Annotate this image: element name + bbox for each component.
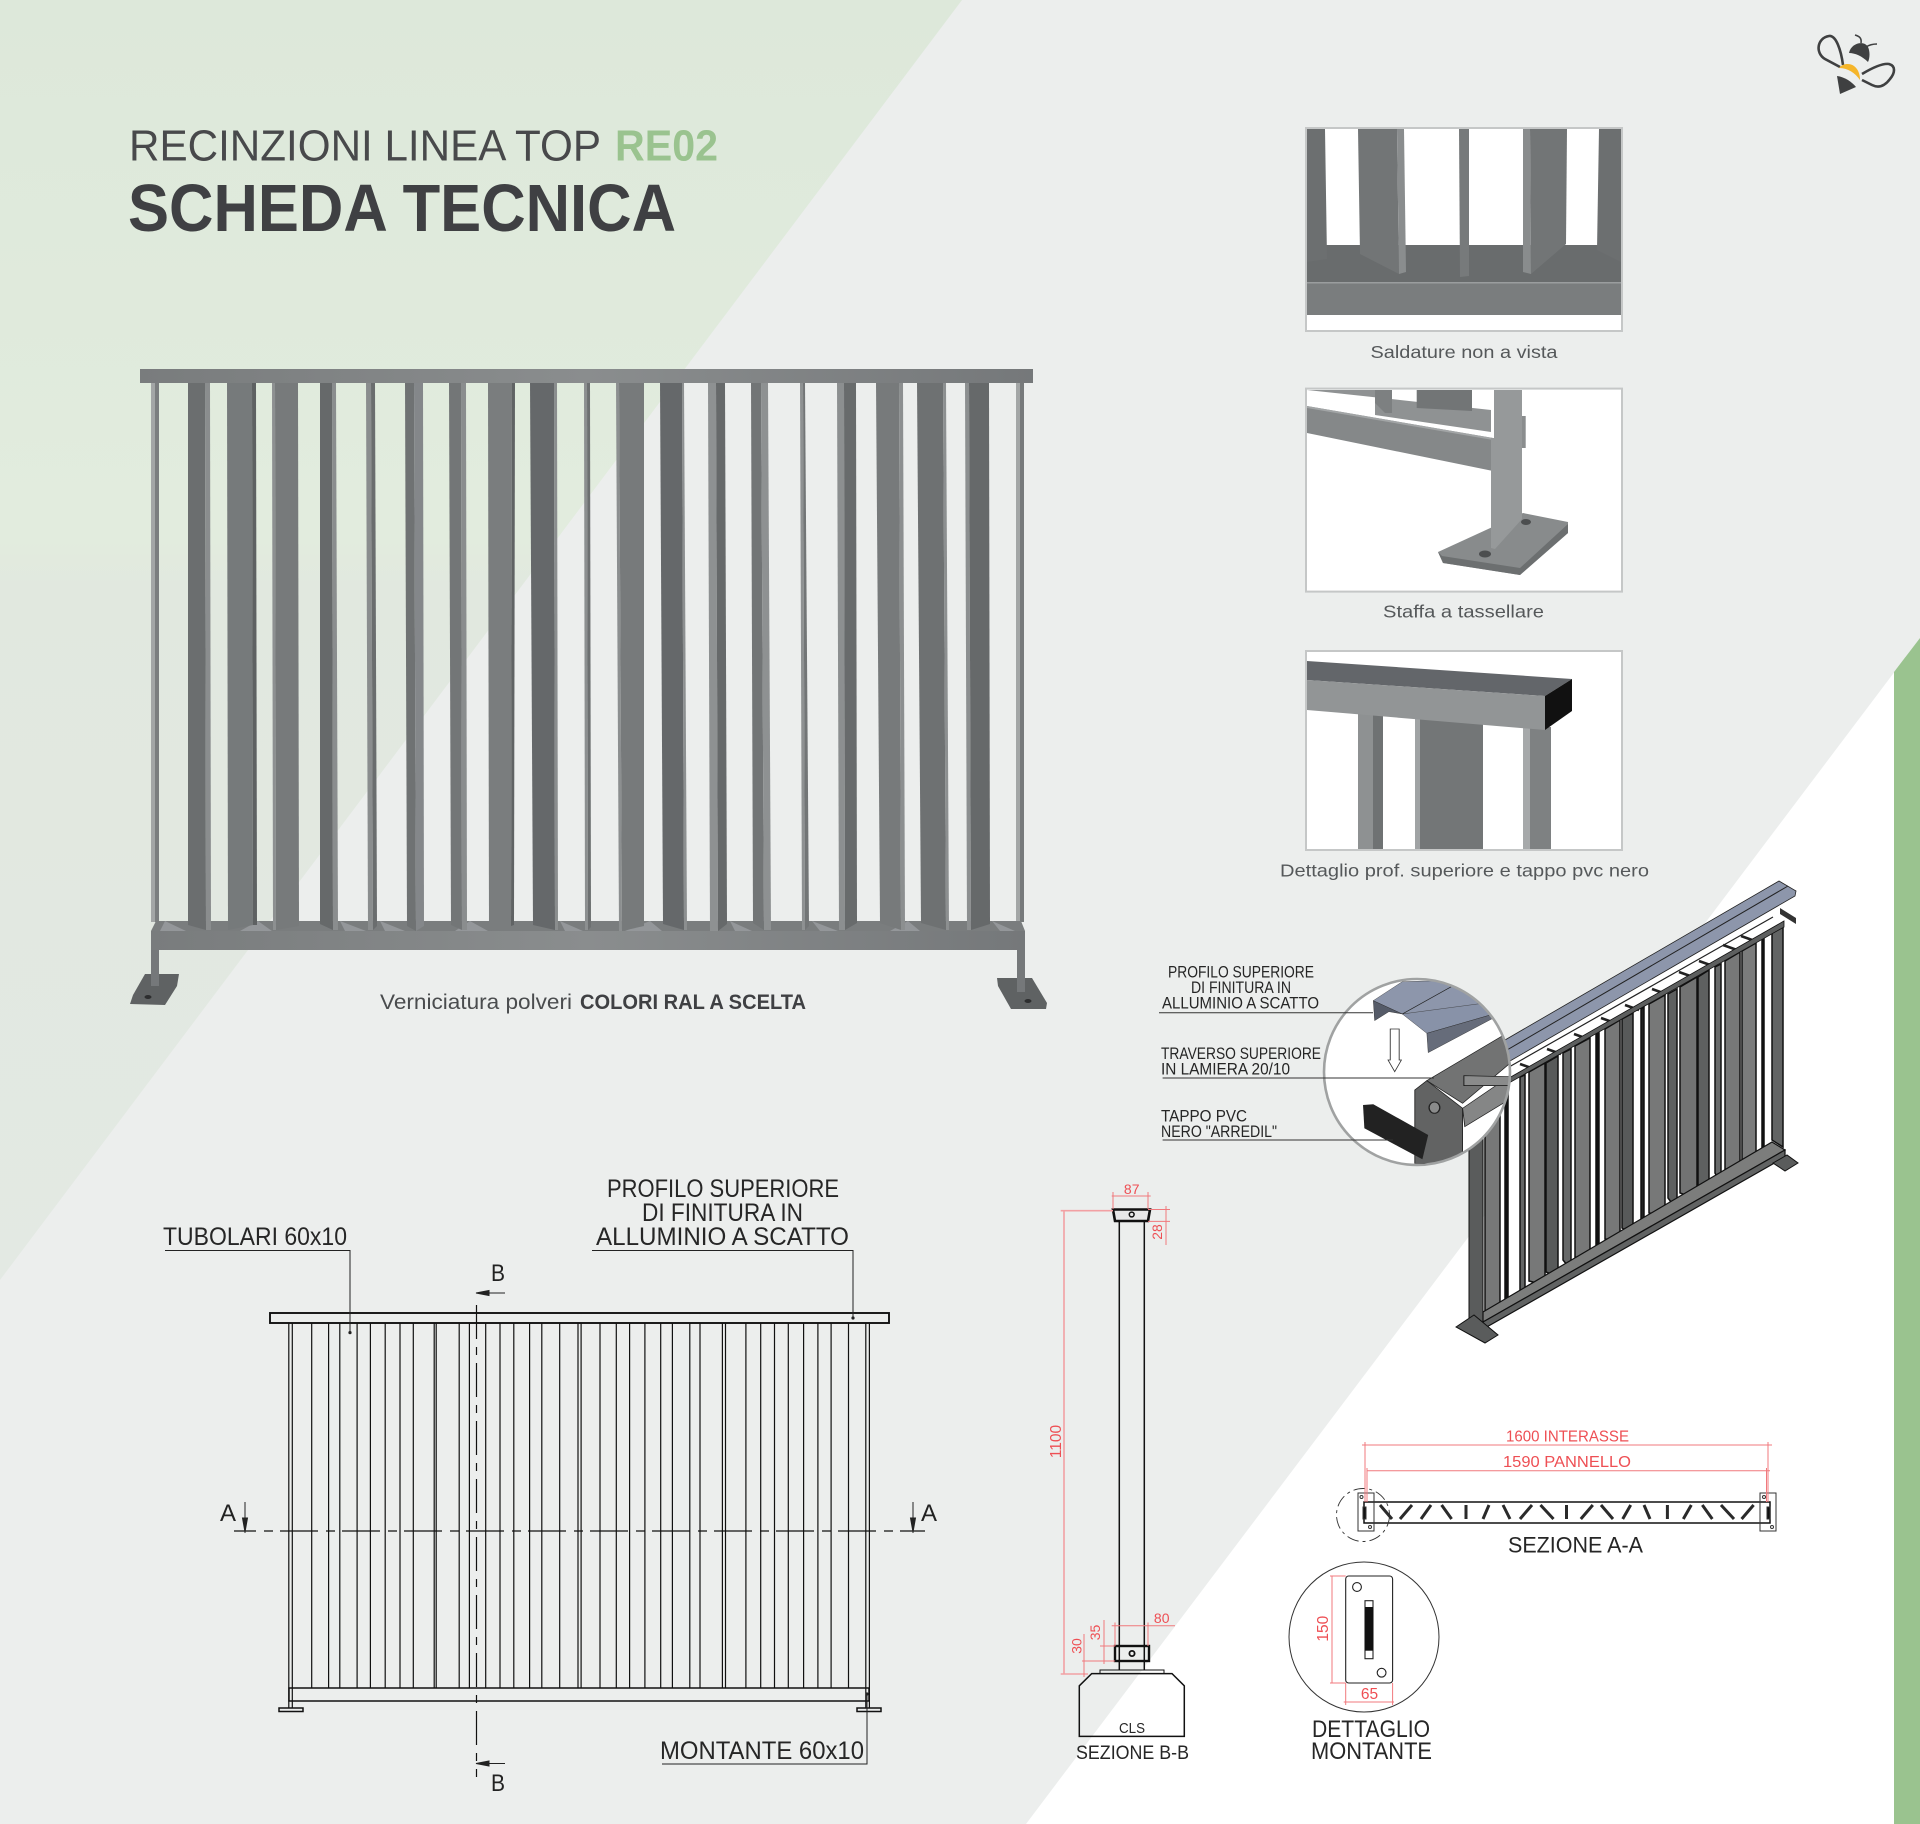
iso callout: tappo pvc: NERO "ARREDIL"	[1161, 1123, 1277, 1141]
iso frame top rail	[1509, 917, 1784, 1083]
dimension values: 87	[1124, 1181, 1140, 1197]
elevation bottom rail and feet	[279, 1688, 881, 1712]
dimension values: 30	[1068, 1638, 1084, 1654]
upright slot	[1365, 1607, 1373, 1651]
iso top profile	[1505, 881, 1796, 1061]
panel: staffa photo	[1306, 389, 1622, 592]
dimension lines	[1061, 1192, 1175, 1677]
label: dettaglio montante	[1311, 1716, 1432, 1765]
concrete block	[1079, 1674, 1184, 1736]
iso end cap	[1780, 908, 1796, 924]
background: green strip	[1894, 638, 1920, 1824]
caption: profile detail: Dettaglio prof. superiore e tappo pvc nero	[1280, 861, 1649, 881]
iso callout: traverso superiore: IN LAMIERA 20/10	[1161, 1061, 1290, 1079]
dimension values: 28	[1149, 1224, 1165, 1240]
title	[128, 122, 718, 246]
section letters: B	[491, 1770, 505, 1797]
caption: saldature: Saldature non a vista	[1370, 342, 1558, 362]
section A-A end plates	[1358, 1493, 1776, 1531]
label: sezione B-B: SEZIONE B-B	[1076, 1743, 1189, 1764]
iso callout: traverso superiore	[1161, 1045, 1321, 1079]
leader dots	[348, 1316, 869, 1696]
section arrows	[242, 1290, 916, 1766]
section letters: B	[491, 1260, 505, 1287]
label: sezione A-A: SEZIONE A-A	[1508, 1533, 1643, 1558]
iso callout: profilo superiore: DI FINITURA IN	[1191, 979, 1291, 997]
base plate	[1346, 1576, 1393, 1683]
iso white backing	[1483, 900, 1790, 1325]
iso callout: tappo pvc	[1161, 1108, 1277, 1141]
iso bars	[1485, 927, 1783, 1312]
section line A-A	[234, 1530, 925, 1532]
dimension values: 80	[1154, 1610, 1170, 1626]
iso callout: tappo pvc: TAPPO PVC	[1161, 1108, 1247, 1126]
technical drawing: front elevation	[163, 1175, 937, 1797]
background: white triangle	[1026, 638, 1920, 1824]
label: profilo superiore: DI FINITURA IN	[642, 1199, 803, 1227]
fence feet	[130, 974, 1047, 1009]
iso callout: profilo superiore	[1162, 964, 1319, 1013]
section A-A bar	[1364, 1502, 1770, 1523]
title line 1: RE02	[615, 122, 718, 171]
icon: bee logo	[1819, 35, 1894, 94]
iso bottom rail	[1483, 1142, 1785, 1328]
section clamp screw	[1129, 1651, 1135, 1656]
dimension: 65: 65	[1361, 1686, 1378, 1703]
technical drawing: section B-B	[1048, 1181, 1189, 1764]
section top cap	[1113, 1210, 1150, 1221]
caption: staffa: Staffa a tassellare	[1383, 602, 1544, 622]
section post	[1100, 1221, 1164, 1674]
label: tubolari: TUBOLARI 60x10	[163, 1223, 347, 1251]
section letters: A	[220, 1500, 236, 1527]
section letters: A	[921, 1500, 937, 1527]
title line 1: RECINZIONI LINEA TOP	[129, 122, 601, 171]
panel: profile detail photo	[1306, 651, 1622, 850]
label: profilo superiore: PROFILO SUPERIORE	[607, 1175, 839, 1203]
caption: coating: COLORI RAL A SCELTA	[580, 991, 806, 1014]
caption: coating: Verniciatura polveri	[380, 991, 572, 1014]
dimension: 1600 interasse: 1600 INTERASSE	[1506, 1429, 1629, 1446]
dimension: 150: 150	[1315, 1615, 1332, 1642]
label: dettaglio montante: DETTAGLIO	[1312, 1716, 1430, 1743]
dimension values: 1100	[1048, 1424, 1065, 1458]
iso callout: profilo superiore: ALLUMINIO A SCATTO	[1162, 995, 1319, 1013]
isometric fence drawing	[1159, 881, 1798, 1343]
section letters	[220, 1260, 937, 1797]
dimension: 1590 pannello: 1590 PANNELLO	[1503, 1454, 1631, 1471]
elevation vertical tubes	[289, 1323, 869, 1708]
dimension values	[1048, 1181, 1170, 1654]
label: CLS: CLS	[1119, 1721, 1145, 1737]
iso callout: traverso superiore: TRAVERSO SUPERIORE	[1161, 1045, 1321, 1063]
detail marker circle	[1336, 1488, 1390, 1542]
fence bars	[188, 382, 990, 931]
detail lens circle	[1324, 979, 1514, 1165]
dimension lines detail	[1330, 1576, 1394, 1705]
elevation top profile	[270, 1313, 889, 1323]
background: green triangle	[0, 0, 962, 1280]
dimension values: 35	[1087, 1625, 1103, 1640]
section A-A slats	[1380, 1505, 1754, 1519]
technical drawing: dettaglio montante	[1289, 1562, 1439, 1765]
iso callout leader lines	[1159, 1013, 1434, 1140]
panel: saldature photo	[1306, 128, 1622, 331]
title line 2: SCHEDA TECNICA	[128, 171, 676, 246]
iso left post	[1469, 1100, 1483, 1325]
photo: main fence	[130, 369, 1047, 1009]
label: montante: MONTANTE 60x10	[660, 1737, 864, 1765]
technical drawing: section A-A	[1336, 1429, 1776, 1558]
fence floor band	[151, 921, 1025, 931]
fence legs and posts	[151, 382, 1025, 992]
label: profilo superiore	[596, 1175, 849, 1251]
detail circle	[1289, 1562, 1439, 1712]
iso callout: profilo superiore: PROFILO SUPERIORE	[1168, 964, 1314, 982]
section line B-B	[476, 1305, 478, 1777]
fence top rail	[140, 369, 1033, 383]
fence bottom rail	[151, 931, 1025, 950]
label: dettaglio montante: MONTANTE	[1311, 1738, 1432, 1765]
dimension lines A-A	[1362, 1442, 1772, 1502]
leader lines	[165, 1250, 867, 1764]
iso lattice slashes	[1520, 936, 1755, 1069]
label: profilo superiore: ALLUMINIO A SCATTO	[596, 1223, 849, 1251]
iso feet	[1456, 1155, 1798, 1343]
